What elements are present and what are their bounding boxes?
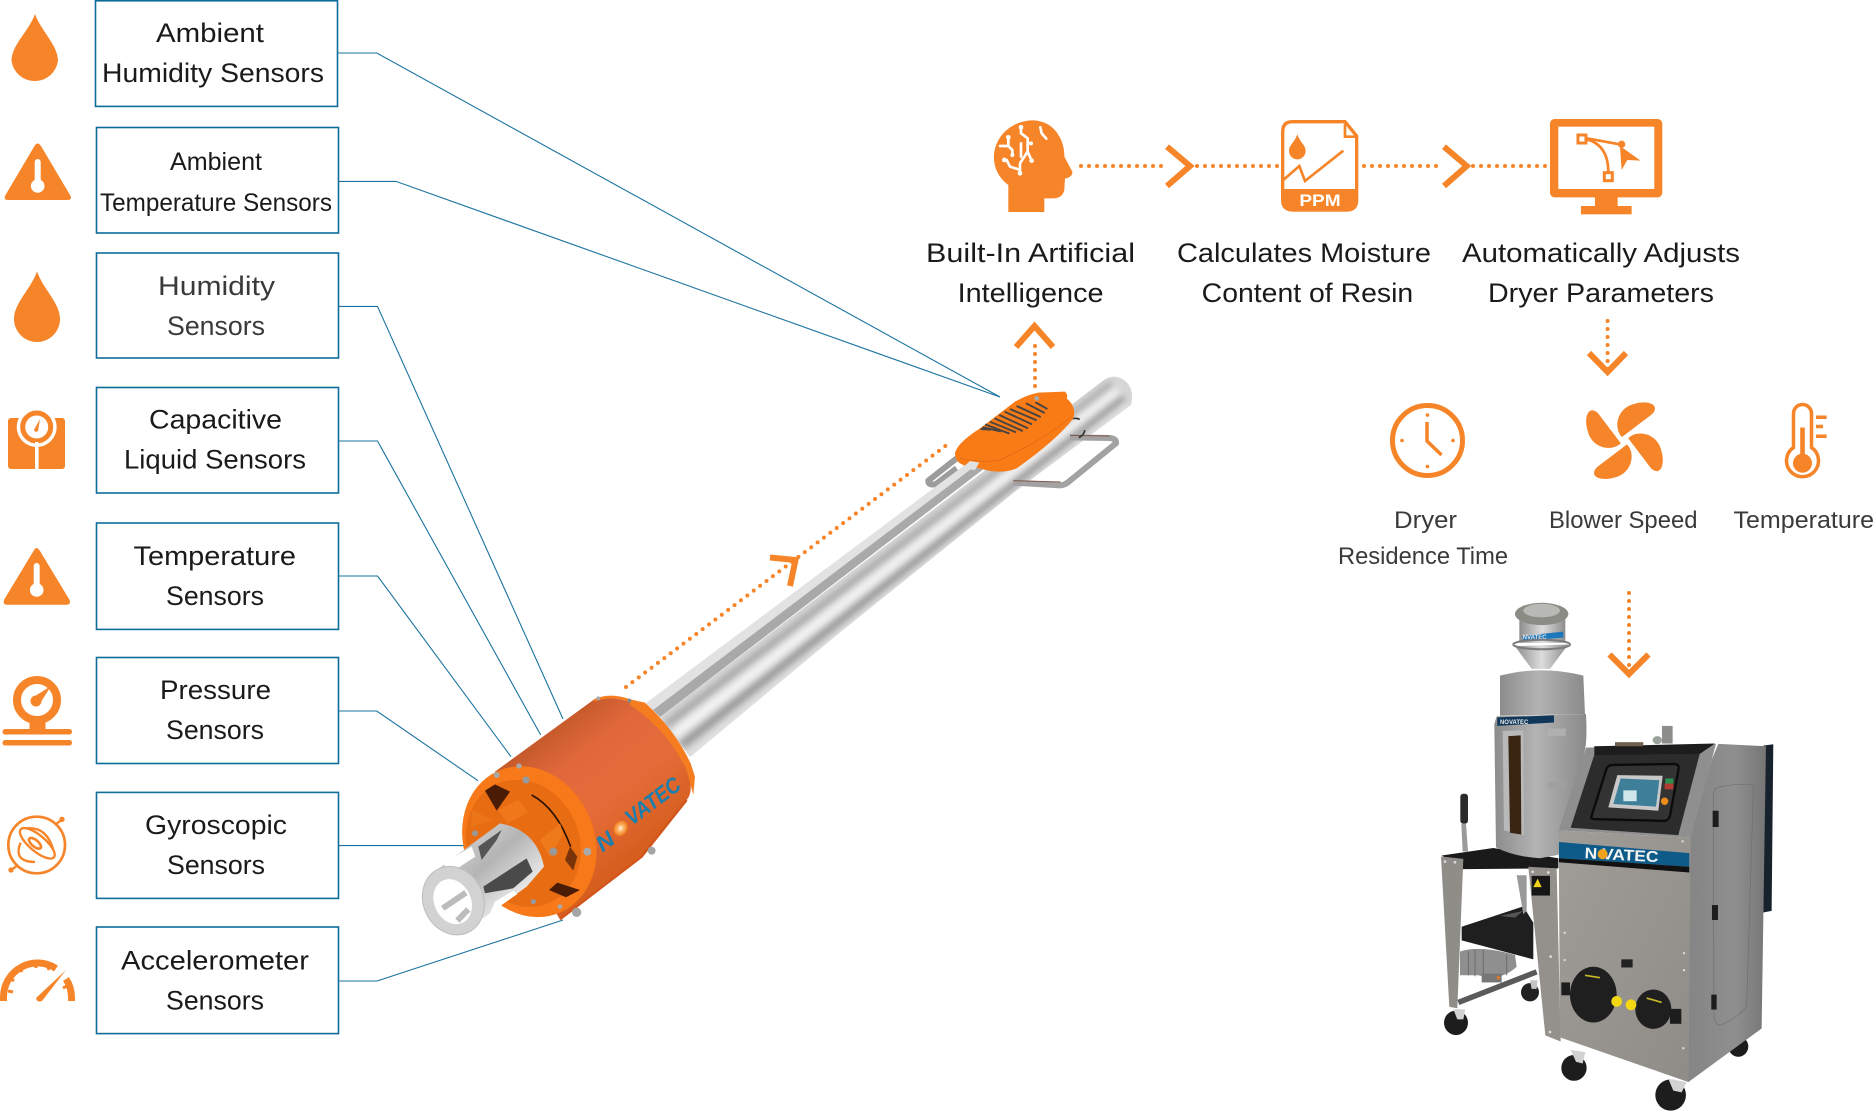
- connector lines: [338, 53, 1000, 981]
- lower shelf and blower motor: [1458, 875, 1537, 1002]
- sensor box: temperature: [96, 523, 338, 629]
- rear electrical panel: [1763, 744, 1773, 913]
- sensor box: capacitive liquid: Capacitive: [149, 404, 282, 434]
- icon: PPM document: [1283, 122, 1357, 212]
- heading text: Intelligence: [958, 278, 1104, 308]
- sensor box: capacitive liquid: [96, 388, 338, 493]
- hopper canister: [1494, 670, 1586, 858]
- cabinet front panel: N VATEC: [1584, 845, 1659, 866]
- rear caster and stand: [1521, 980, 1748, 1057]
- sensor box: accelerometer: Sensors: [166, 986, 264, 1016]
- dryer machine illustration: [1441, 603, 1773, 1111]
- heading text: [1462, 238, 1740, 308]
- icon: speedometer: [4, 962, 72, 1002]
- arrow: AI to moisture: [1081, 147, 1278, 186]
- sensor box: humidity: Sensors: [167, 311, 265, 341]
- arrow: moisture to dryer parameters: [1364, 147, 1546, 186]
- sensor box: pressure: Sensors: [166, 715, 264, 745]
- label: Residence Time: [1338, 543, 1508, 570]
- metal nozzle: [437, 823, 544, 918]
- sensor box: accelerometer: [96, 927, 338, 1034]
- orange sensor housing: [411, 696, 695, 945]
- heading text: Content of Resin: [1202, 278, 1413, 308]
- sensor box: capacitive liquid: Liquid Sensors: [124, 444, 306, 474]
- label: [1338, 507, 1508, 570]
- sensor probe illustration: [411, 377, 1135, 945]
- icon: warning thermometer, ambient temperature: [5, 144, 71, 200]
- heading text: Calculates Moisture: [1177, 238, 1431, 268]
- parameter: blower speed: [1549, 402, 1698, 534]
- arrow: down to dryer parameters: [1589, 321, 1626, 372]
- icon: fan: [1586, 402, 1663, 479]
- label: Dryer: [1394, 507, 1457, 534]
- sensor box: ambient temperature: Ambient: [170, 148, 262, 176]
- sensor box: accelerometer: Accelerometer: [121, 946, 309, 976]
- front casters: [1444, 1009, 1687, 1111]
- step: calculates moisture content: [1177, 122, 1431, 308]
- sensor box: gyroscopic: Sensors: [167, 850, 265, 880]
- sensor box: temperature: Temperature: [134, 541, 296, 571]
- cabinet front panel: [1559, 830, 1691, 1082]
- sensor box: ambient humidity: [96, 1, 338, 106]
- vacuum receiver on top: [1513, 603, 1570, 669]
- sensor box: humidity: Humidity: [158, 271, 276, 301]
- heading text: Automatically Adjusts: [1462, 238, 1740, 268]
- step: built-in artificial intelligence: [926, 120, 1135, 308]
- sensor box: ambient temperature: Temperature Sensors: [100, 189, 332, 217]
- icon: clock: [1392, 406, 1462, 476]
- rear handle: [928, 458, 957, 485]
- parameter: dryer residence time: [1338, 406, 1508, 570]
- NOVATEC logo on housing: VATEC: [620, 771, 686, 830]
- probe tube: [646, 377, 1135, 764]
- sensor box: pressure: [96, 658, 338, 764]
- arrow: down to dryer: [1610, 593, 1648, 674]
- icon: AI head: [994, 120, 1072, 212]
- bolts: [494, 772, 500, 778]
- sensor box: ambient humidity: Ambient: [156, 18, 265, 48]
- icon: pressure gauge: [2, 680, 72, 746]
- cabinet side panel: [1688, 744, 1766, 1082]
- hopper canister: NOVATEC: [1500, 719, 1528, 726]
- parameter: temperature: [1734, 404, 1874, 534]
- icon: PPM document: PPM: [1299, 191, 1341, 210]
- icon: monitor with vector curve: [1550, 119, 1662, 214]
- electronics pod: [955, 392, 1074, 472]
- sensor box: pressure: Pressure: [160, 675, 271, 705]
- sensor box: gyroscopic: Gyroscopic: [145, 810, 287, 840]
- dotted arrow along probe: [626, 444, 948, 687]
- vacuum receiver on top: NVATEC: [1523, 634, 1547, 641]
- heading text: Built-In Artificial: [926, 238, 1135, 268]
- sensor box: temperature: Sensors: [166, 581, 264, 611]
- icon: water drop, humidity: [14, 271, 60, 342]
- sensor box: humidity: [96, 253, 338, 358]
- icon: thermometer: [1786, 404, 1827, 477]
- shelf top: [1442, 848, 1558, 869]
- control console: [1559, 726, 1716, 838]
- front handle: [1013, 417, 1116, 485]
- label: Temperature: [1734, 507, 1874, 534]
- NOVATEC logo on housing: [591, 771, 686, 857]
- heading text: [1177, 238, 1431, 308]
- stand legs: [1441, 857, 1561, 1041]
- NOVATEC logo on housing: N: [591, 826, 620, 857]
- sensor box: ambient temperature: [96, 128, 338, 233]
- icon: water drop, ambient humidity: [12, 14, 58, 81]
- handle lever: [1460, 794, 1468, 851]
- icon: gyroscope: [8, 817, 65, 873]
- label: Blower Speed: [1549, 507, 1698, 534]
- step: automatically adjusts dryer parameters: [1462, 119, 1740, 308]
- sensor box: ambient humidity: Humidity Sensors: [102, 58, 324, 88]
- drain doors and knobs: [1561, 959, 1681, 1029]
- heading text: Dryer Parameters: [1488, 278, 1714, 308]
- dotted arrow up to AI: [1016, 326, 1053, 386]
- heading text: [926, 238, 1135, 308]
- sensor box: gyroscopic: [96, 792, 338, 898]
- icon: warning thermometer, temperature: [4, 548, 70, 605]
- icon: scale, capacitive liquid: [8, 407, 65, 470]
